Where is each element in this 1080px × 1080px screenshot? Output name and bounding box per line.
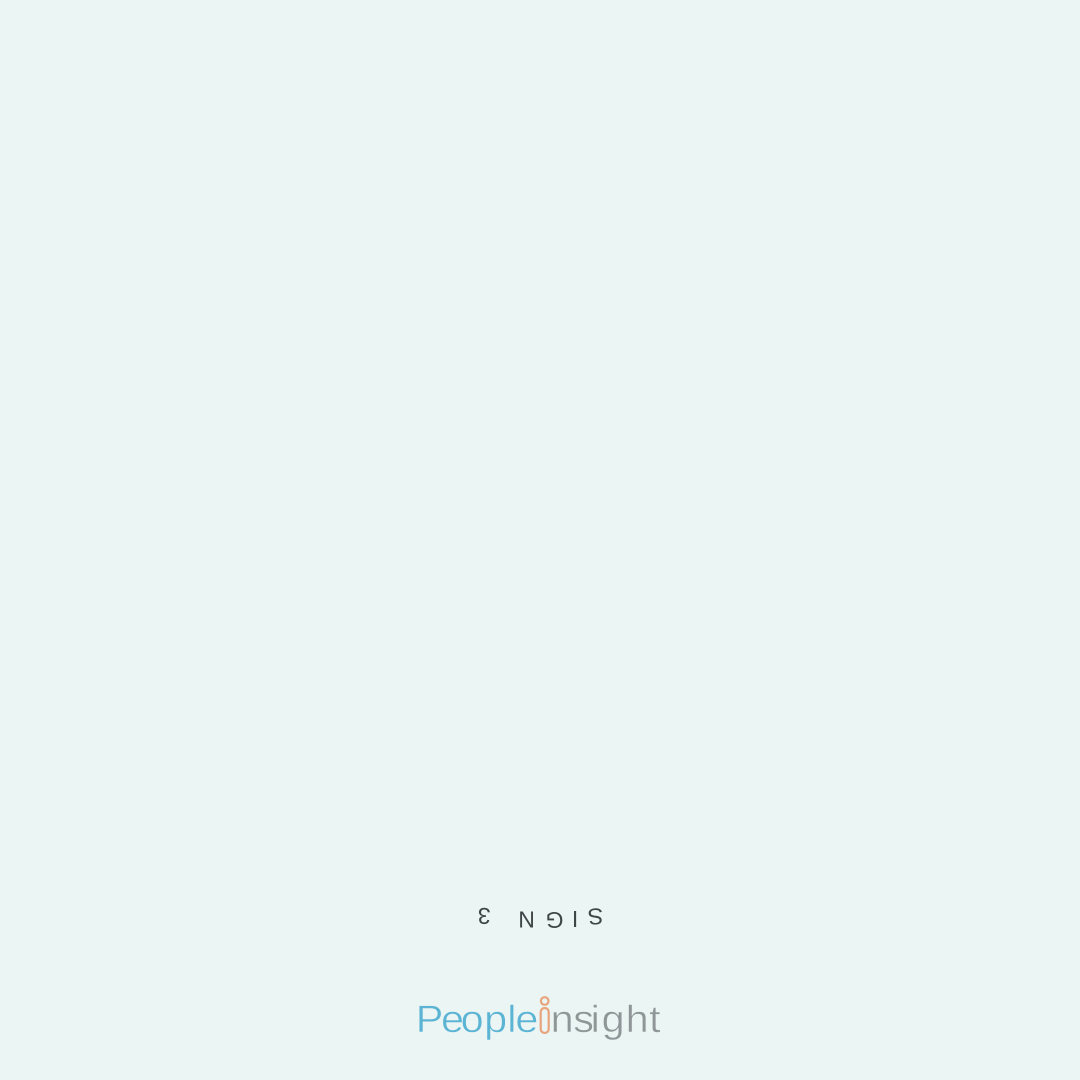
heading: upside-down SIGN 3: G [546, 907, 563, 933]
logo: People Insight [416, 997, 661, 1041]
heading: upside-down SIGN 3: 3 [477, 903, 491, 929]
heading: upside-down SIGN 3: S [587, 903, 604, 930]
icon: orange figure letter i [541, 997, 549, 1033]
heading: upside-down SIGN 3: N [518, 906, 535, 932]
heading: upside-down SIGN 3: I [572, 906, 578, 932]
logo: People Insight: People [416, 999, 538, 1041]
heading: upside-down SIGN 3 [477, 903, 604, 933]
logo: People Insight: nsight [551, 999, 661, 1041]
